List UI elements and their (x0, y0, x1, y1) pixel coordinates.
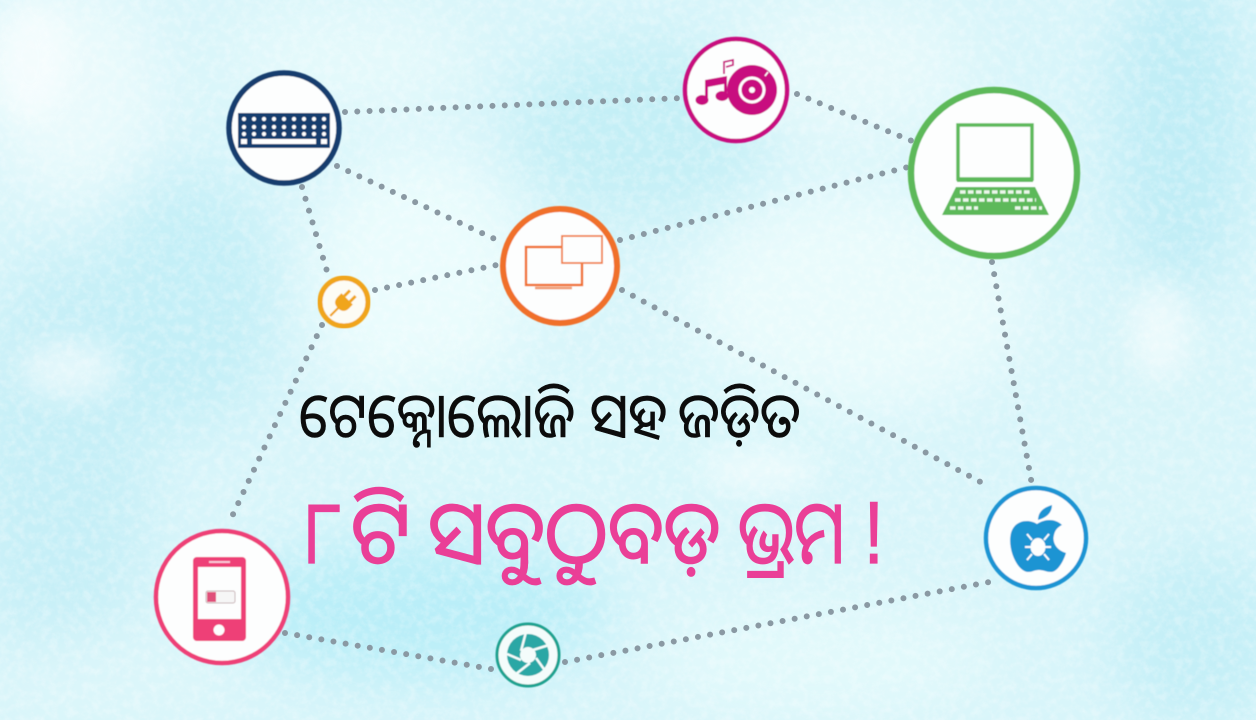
title line 2: ଭ୍ରମ (738, 483, 845, 582)
title line 2: ଟି (351, 484, 411, 582)
connector: keyboard to plug (302, 187, 329, 278)
connector: phone to camera (285, 633, 497, 670)
title line 1: ସହ (590, 382, 667, 451)
connector: camera to apple (565, 580, 1000, 662)
title line 1 (299, 382, 800, 451)
icon: apple with bug (986, 488, 1086, 588)
title line 2: ବଡ଼ (608, 483, 720, 582)
connector: plug to monitors (375, 265, 497, 290)
connector: keyboard to monitors (337, 166, 497, 240)
title line 2: ସବୁଠୁ (428, 485, 607, 586)
title line 2: ! (864, 483, 884, 582)
connector: monitors to laptop (620, 167, 908, 240)
connector: keyboard to music (345, 98, 682, 112)
dotted connectors (228, 94, 1032, 670)
connector: laptop to apple (992, 262, 1032, 485)
connector: music to laptop (797, 94, 912, 141)
title line 2: ୮ (302, 483, 342, 582)
icon: keyboard (229, 73, 339, 183)
icon: monitors (503, 209, 617, 323)
icon: phone battery (156, 531, 288, 663)
title line 2 (302, 483, 884, 586)
connector: plug to phone (228, 325, 322, 525)
title line 1: ଟେକ୍ନୋଲୋଜି (299, 382, 575, 451)
title line 1: ଜଡ଼ିତ (678, 382, 800, 451)
icon: camera aperture (497, 624, 559, 686)
icon: laptop (911, 90, 1077, 256)
icon: music disc (685, 39, 787, 141)
connector: monitors to apple (622, 290, 990, 487)
icon: plug (320, 278, 368, 326)
